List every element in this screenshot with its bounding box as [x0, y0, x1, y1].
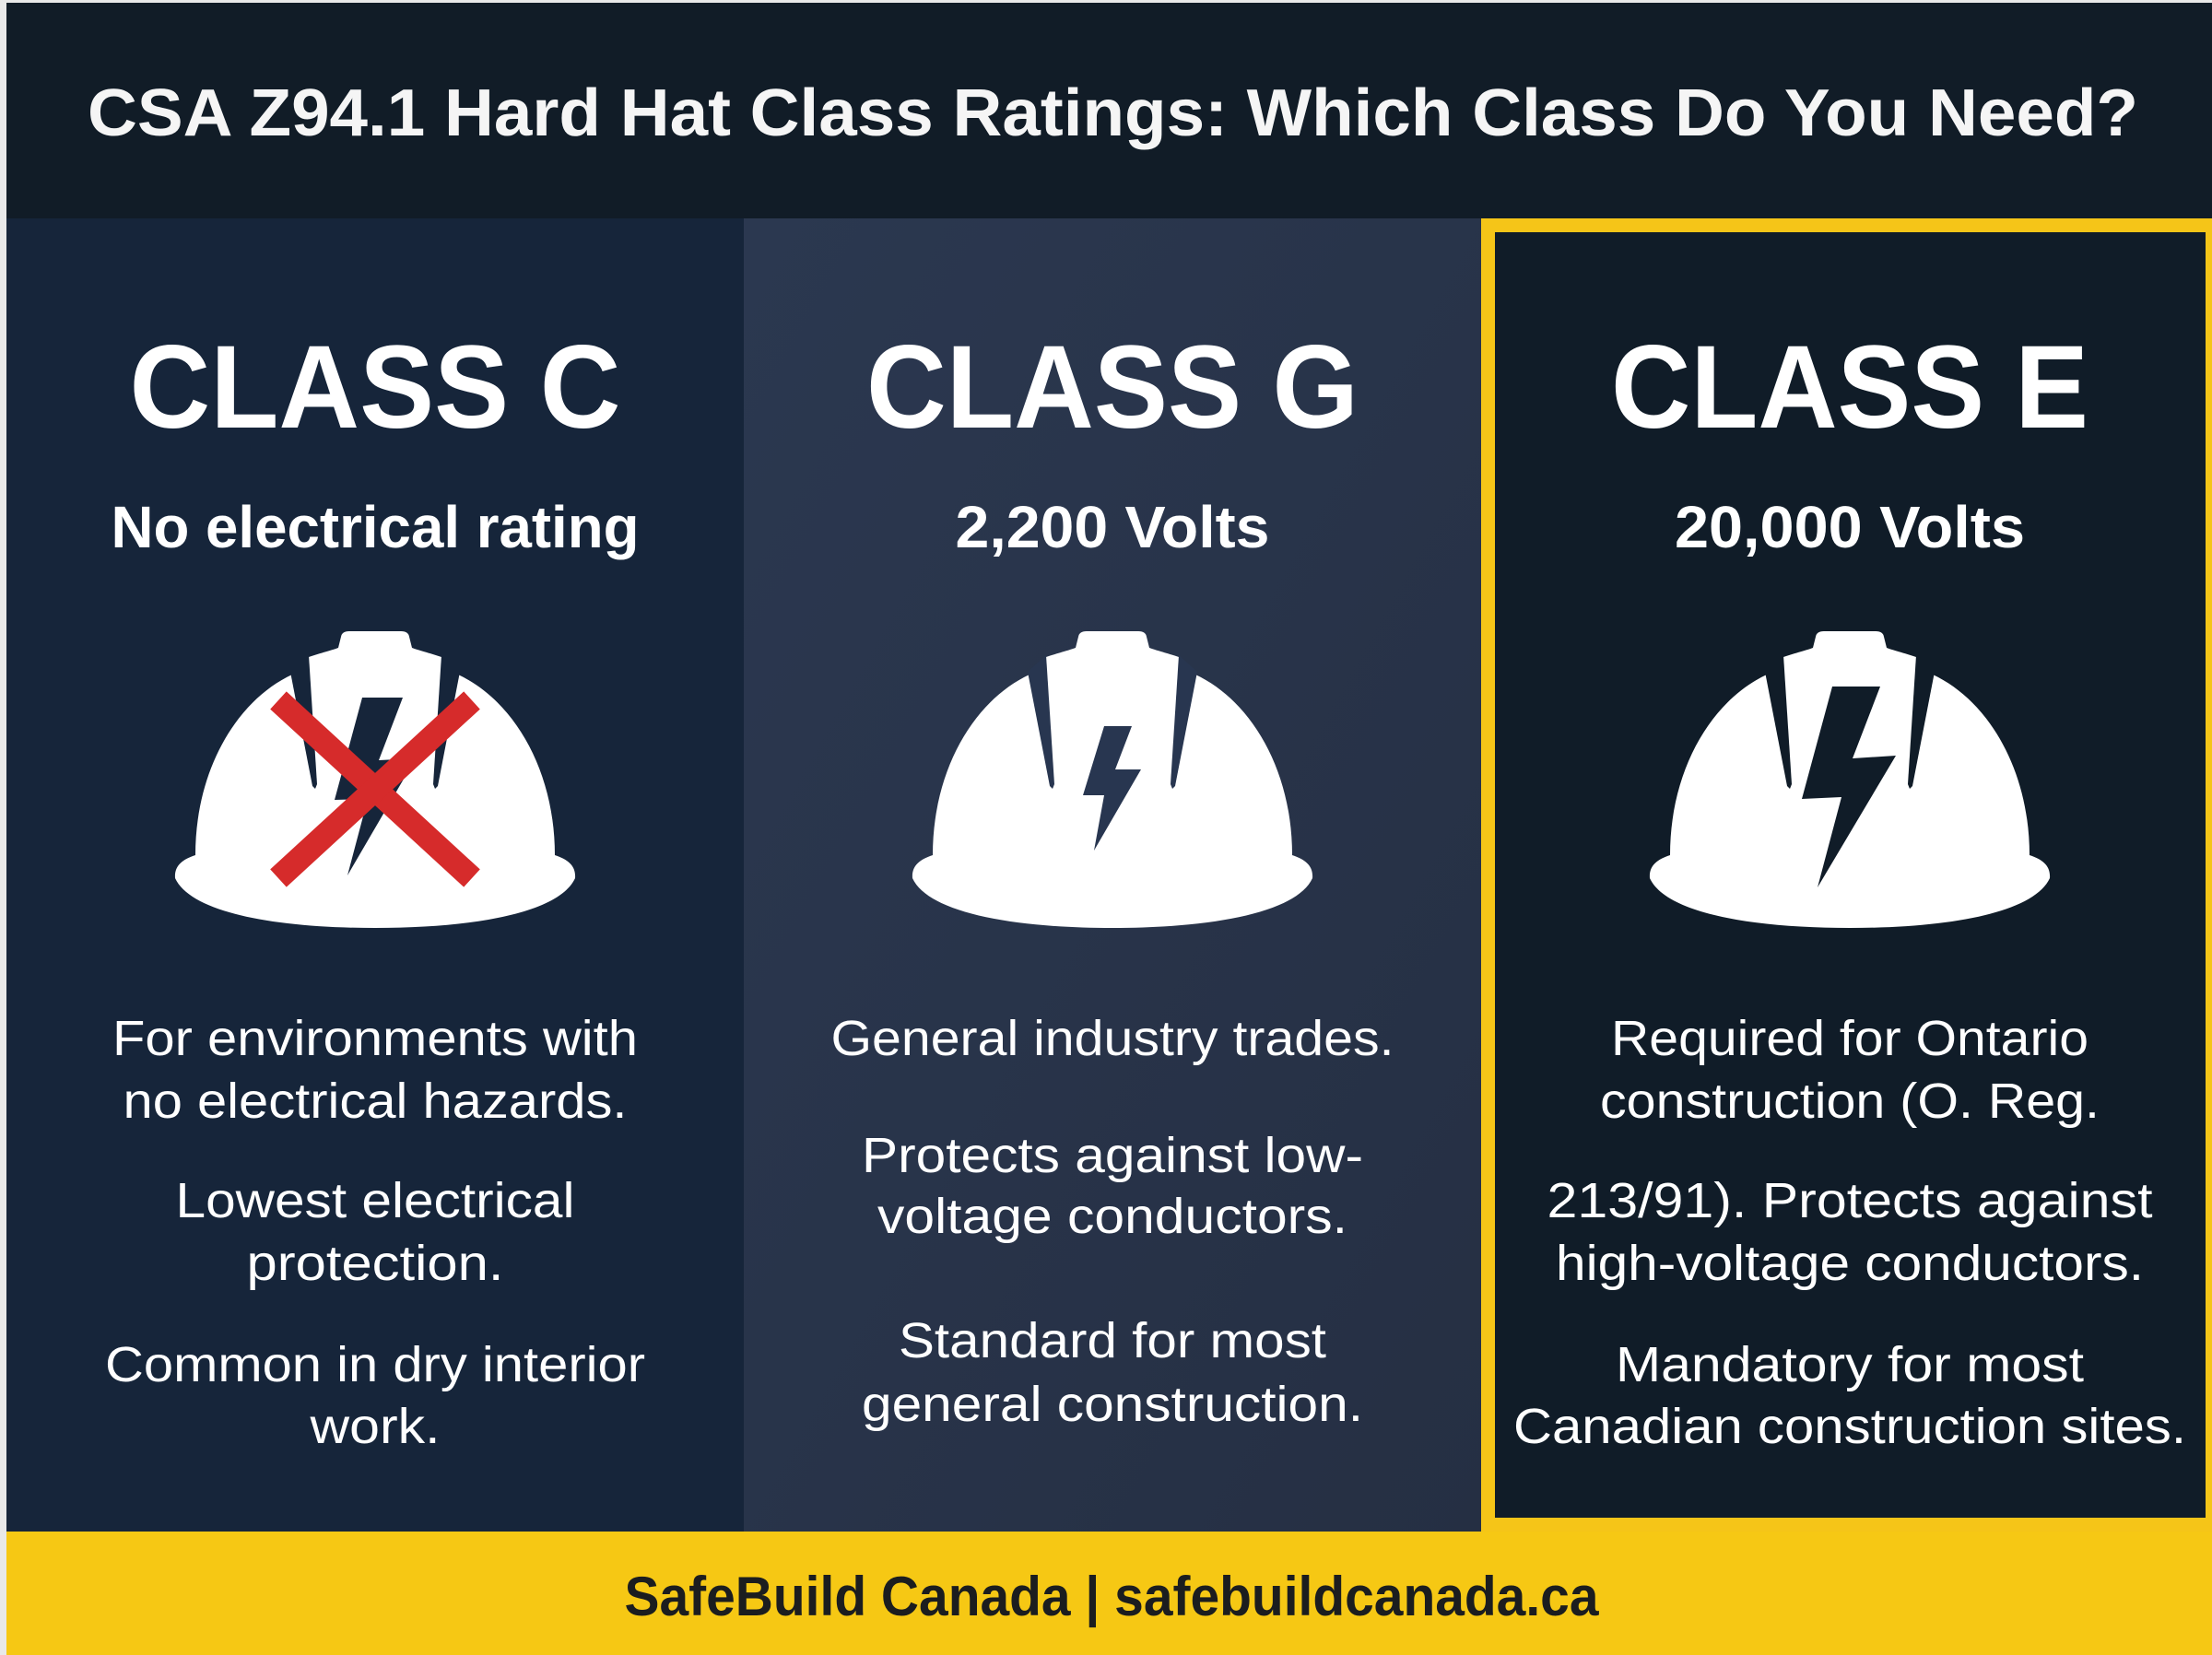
text: class C description: Common in dry interior [105, 1337, 645, 1392]
icon: hard hat with small bolt [912, 631, 1312, 928]
text: class E description: Canadian construction sites. [1513, 1399, 2186, 1454]
text: class E description: 213/91). Protects against [1547, 1173, 2153, 1228]
text: class C description: protection. [247, 1236, 503, 1291]
text: class C description: work. [309, 1399, 441, 1454]
heading: class C: CLASS C [129, 322, 621, 453]
text: class E description: construction (O. Reg. [1600, 1074, 2100, 1129]
text: class C description [105, 1011, 645, 1454]
text: class E description: Mandatory for most [1616, 1337, 2084, 1392]
text: class C description: Lowest electrical [175, 1173, 575, 1228]
panel: class E (highlighted) [1481, 218, 2212, 1532]
icon: hard hat with large bolt [1650, 631, 2050, 928]
text: class G description: voltage conductors. [877, 1189, 1347, 1244]
text: class E description [1513, 1011, 2186, 1454]
text: class G description: Standard for most [899, 1313, 1326, 1368]
subtitle: 2,200 volts: 2,200 Volts [955, 494, 1270, 560]
text: class C description: no electrical hazards. [124, 1074, 627, 1129]
panel: class G [744, 218, 1481, 1532]
text: class E description: Required for Ontario [1611, 1011, 2088, 1066]
icon: hard hat with red X [175, 631, 575, 928]
text: class G description [831, 1011, 1394, 1432]
subtitle: 20,000 volts: 20,000 Volts [1675, 494, 2025, 560]
text: class G description: general construction. [862, 1377, 1363, 1432]
subtitle: no electrical rating: No electrical rating [111, 494, 640, 560]
text: class G description: General industry trades. [831, 1011, 1394, 1066]
footer text: SafeBuild Canada | safebuildcanada.ca [625, 1566, 1599, 1628]
heading: class G: CLASS G [866, 322, 1359, 453]
panel: class C [6, 218, 744, 1532]
footer [6, 1532, 2212, 1655]
title bar [6, 3, 2212, 218]
heading: class E: CLASS E [1611, 322, 2088, 453]
text: class E description: high-voltage conductors. [1556, 1236, 2144, 1291]
title: CSA Z94.1 Hard Hat Class Ratings: Which Class Do You Need? [88, 76, 2138, 150]
text: class C description: For environments with [112, 1011, 638, 1066]
text: class G description: Protects against low- [862, 1128, 1363, 1183]
